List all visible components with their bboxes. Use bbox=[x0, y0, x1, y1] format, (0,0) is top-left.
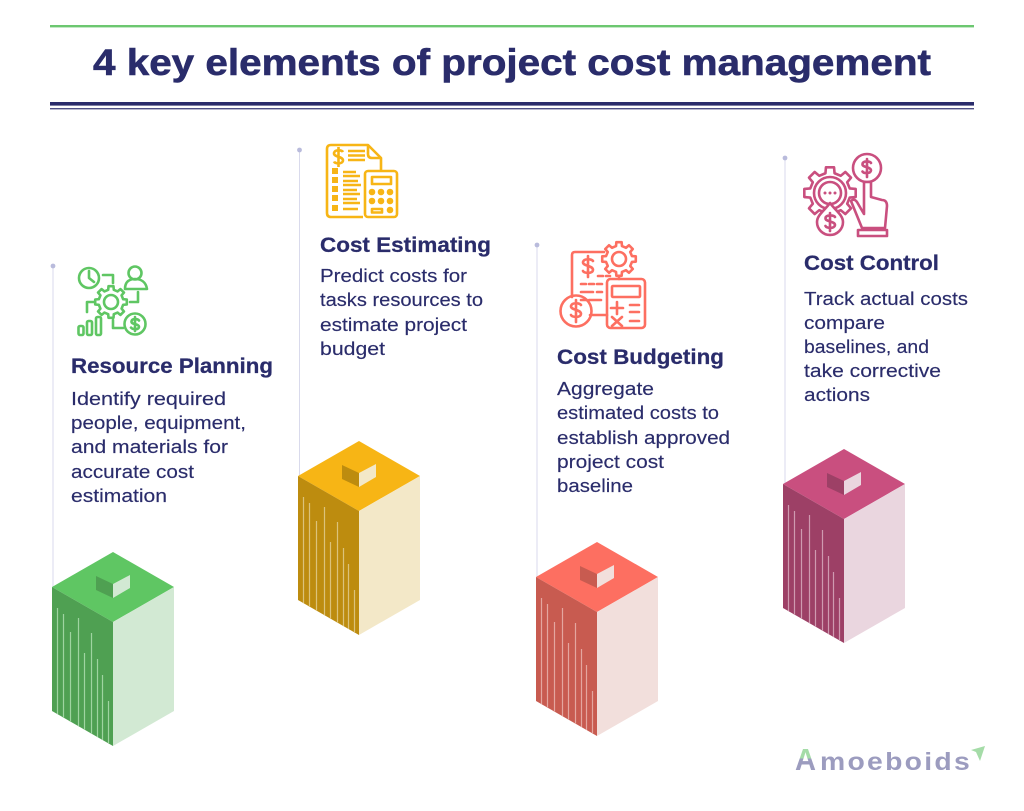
text: cost control description bbox=[804, 289, 968, 405]
text: cost control description: actions bbox=[804, 385, 870, 405]
text: cost budgeting description: Aggregate bbox=[557, 379, 654, 399]
text: cost estimating description: Predict costs for bbox=[320, 266, 467, 286]
text: cost budgeting description: establish approved bbox=[557, 428, 730, 448]
text: cost estimating description: budget bbox=[320, 339, 385, 359]
text: cost estimating description bbox=[320, 266, 483, 359]
text: cost control description: Track actual costs bbox=[804, 289, 968, 309]
heading: cost estimating: Cost Estimating bbox=[320, 234, 491, 257]
block: green cuboid bbox=[52, 552, 174, 746]
heading: resource planning: Resource Planning bbox=[71, 355, 273, 378]
text: cost budgeting description: estimated costs to bbox=[557, 403, 719, 423]
title: 4 key elements of project cost management bbox=[93, 42, 931, 83]
logo: Amoeboids: A bbox=[795, 742, 816, 777]
panel: cost control bbox=[783, 154, 968, 643]
logo: Amoeboids: moeboids bbox=[820, 748, 972, 776]
icon: budget sheet, gear, coin and calculator bbox=[560, 242, 645, 328]
logo: Amoeboids bbox=[795, 742, 985, 777]
text: cost budgeting description: project cost bbox=[557, 452, 664, 472]
text: resource planning description bbox=[71, 389, 246, 506]
text: resource planning description: Identify required bbox=[71, 389, 226, 409]
heading: cost budgeting: Cost Budgeting bbox=[557, 346, 724, 369]
block: yellow cuboid bbox=[298, 441, 420, 635]
panel: resource planning bbox=[52, 266, 273, 746]
heading: cost control: Cost Control bbox=[804, 252, 939, 275]
block: red cuboid bbox=[536, 542, 658, 736]
text: cost control description: baselines, and bbox=[804, 337, 929, 357]
text: resource planning description: estimation bbox=[71, 486, 167, 506]
icon: document and calculator bbox=[327, 145, 397, 217]
text: cost estimating description: estimate project bbox=[320, 315, 467, 335]
block: pink cuboid bbox=[783, 449, 905, 643]
text: cost budgeting description: baseline bbox=[557, 476, 633, 496]
text: cost budgeting description bbox=[557, 379, 730, 496]
icon: clock, person, gear, bars and dollar bbox=[78, 266, 147, 335]
text: resource planning description: and materials for bbox=[71, 437, 228, 457]
text: cost control description: take corrective bbox=[804, 361, 941, 381]
text: resource planning description: people, equipment, bbox=[71, 413, 246, 433]
text: cost control description: compare bbox=[804, 313, 885, 333]
text: resource planning description: accurate cost bbox=[71, 462, 194, 482]
panel: cost budgeting bbox=[536, 242, 730, 736]
text: cost estimating description: tasks resources to bbox=[320, 290, 483, 310]
icon: gear, drop, coin and pointing hand bbox=[804, 154, 887, 236]
panel: cost estimating bbox=[298, 145, 491, 635]
